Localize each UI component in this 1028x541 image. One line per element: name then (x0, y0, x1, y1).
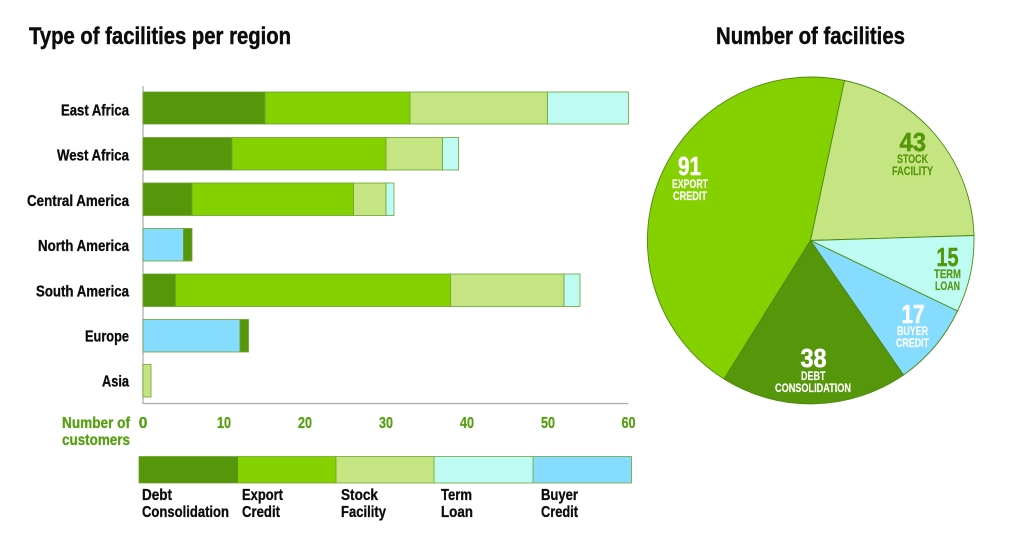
region labels: East Africa (61, 102, 129, 120)
bar chart: facilities per region (27, 86, 636, 449)
axis tick labels: 40 (460, 415, 474, 432)
legend (139, 456, 632, 521)
legend labels: Credit (541, 504, 578, 521)
axis tick labels (139, 415, 636, 432)
legend labels: Facility (341, 504, 386, 521)
pie label: 38 debt consolidation: CONSOLIDATION (775, 383, 851, 395)
axis tick labels: 0 (139, 415, 147, 432)
region labels: Europe (85, 328, 129, 346)
pie chart (647, 77, 974, 404)
legend labels: Stock (341, 487, 378, 504)
legend labels (142, 487, 578, 521)
pie label: 15 term loan: LOAN (935, 281, 960, 293)
axis title: number of customers (62, 415, 131, 449)
bar: Europe (143, 320, 248, 352)
pie label: 17 buyer credit: CREDIT (896, 338, 929, 350)
pie label: 43 stock facility: STOCK (897, 154, 929, 166)
region labels: North America (38, 238, 129, 255)
axis tick labels: 10 (217, 415, 231, 432)
pie label: 91 export credit: 91 (678, 153, 701, 181)
slice: debt consolidation (724, 240, 904, 404)
pie label: 17 buyer credit: 17 (902, 301, 924, 329)
pie label: 91 export credit: CREDIT (673, 191, 707, 203)
legend labels: Debt (142, 487, 172, 504)
pie label: 91 export credit (672, 153, 708, 203)
pie label: 43 stock facility (892, 129, 933, 178)
legend labels: Loan (441, 504, 473, 521)
pie label: 91 export credit: EXPORT (672, 179, 708, 191)
heading: bar chart title: Type of facilities per region (29, 23, 291, 50)
slice: term loan (810, 236, 974, 311)
region labels: Central America (27, 193, 129, 210)
axis tick labels: 50 (541, 415, 555, 432)
region labels: South America (36, 284, 129, 300)
legend labels: Buyer (541, 487, 578, 504)
pie label: 38 debt consolidation: DEBT (801, 371, 826, 383)
pie label: 17 buyer credit: BUYER (897, 326, 929, 338)
pie label: 15 term loan (934, 244, 961, 293)
slice: export credit (647, 77, 844, 379)
bar: Central America (143, 183, 394, 216)
pie label: 15 term loan: TERM (934, 269, 961, 281)
pie label: 43 stock facility: FACILITY (892, 166, 933, 178)
legend labels: Term (441, 487, 472, 504)
pie label: 38 debt consolidation: 38 (800, 345, 826, 373)
panel: type of facilities per region (27, 23, 636, 521)
axis tick labels: 20 (298, 415, 312, 432)
pie label: 43 stock facility: 43 (900, 129, 926, 157)
pie label: 17 buyer credit (896, 301, 929, 350)
region labels: West Africa (57, 148, 129, 164)
axis tick labels: 60 (622, 415, 636, 432)
region labels: Asia (102, 374, 129, 390)
legend labels: Credit (242, 504, 280, 521)
axis title: number of customers: customers (62, 432, 130, 449)
bar: Asia (143, 364, 151, 397)
bar: South America (143, 274, 580, 306)
chart axes (143, 86, 628, 404)
heading: pie chart title: Number of facilities (716, 23, 905, 50)
axis title: number of customers: Number of (62, 415, 131, 432)
axis tick labels: 30 (379, 415, 393, 432)
legend labels: Export (242, 487, 283, 504)
region labels (27, 102, 129, 390)
slice: buyer credit (810, 240, 958, 375)
pie label: 15 term loan: 15 (936, 244, 958, 272)
legend swatches (139, 456, 632, 483)
slice: stock facility (810, 80, 974, 240)
bar: North America (143, 228, 192, 261)
bar: West Africa (143, 138, 458, 170)
bar: East Africa (143, 92, 628, 124)
pie label: 38 debt consolidation (775, 345, 851, 395)
panel: number of facilities (647, 23, 974, 404)
legend labels: Consolidation (142, 504, 229, 521)
